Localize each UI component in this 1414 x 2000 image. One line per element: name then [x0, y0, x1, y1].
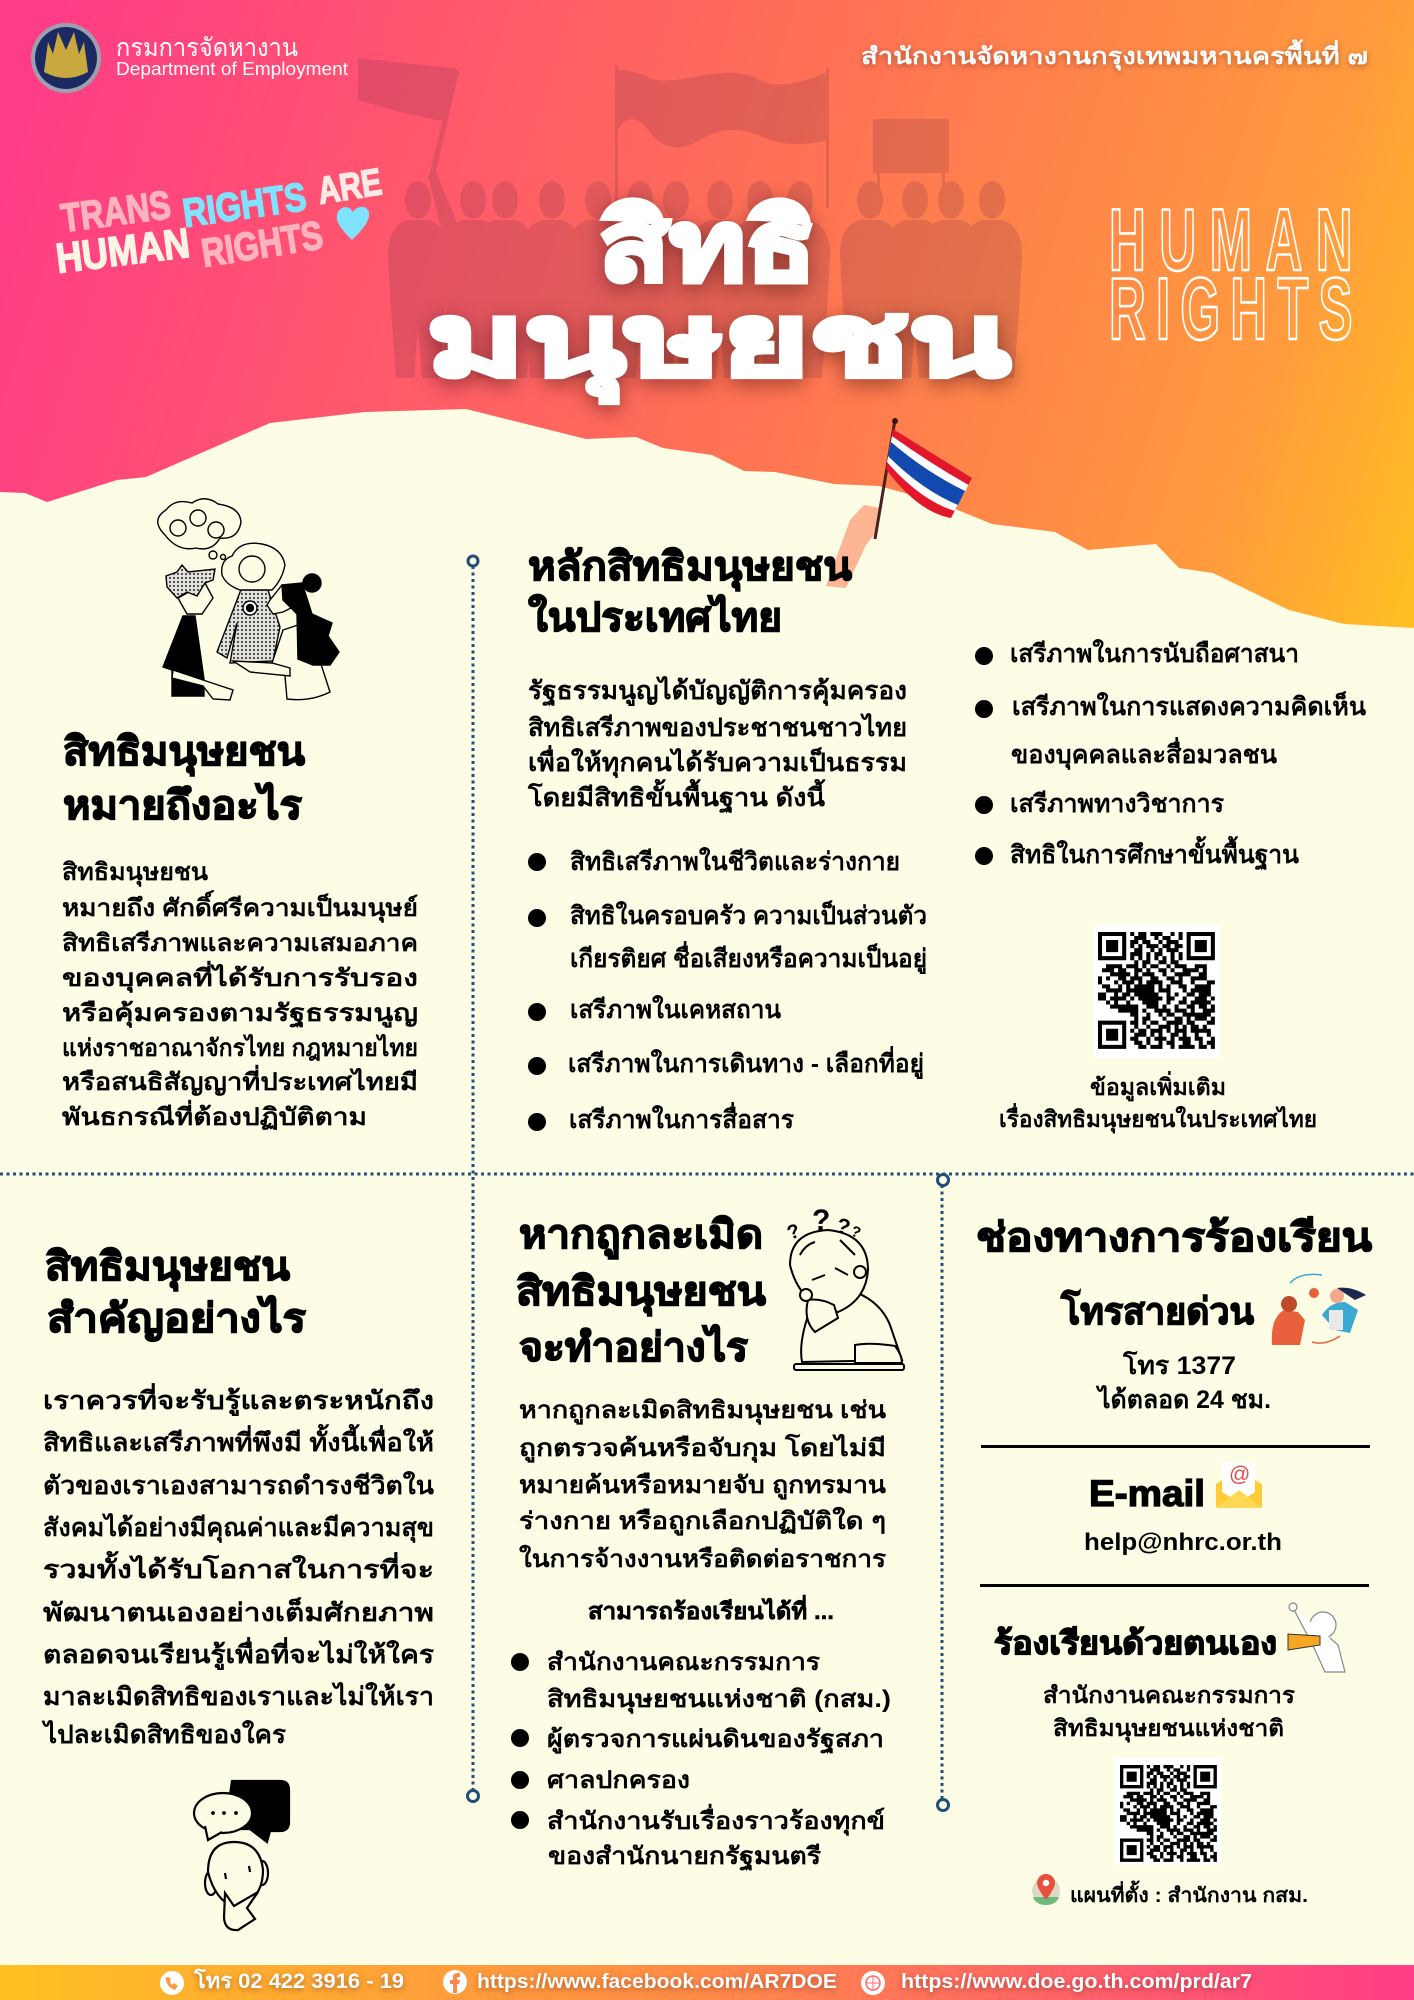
heading: [45, 1245, 307, 1342]
QR caption: เรื่องสิทธิมนุษยชนในประเทศไทย: [999, 1102, 1317, 1134]
hand waving Thai flag: [826, 418, 972, 588]
icon: facebook: [443, 1970, 467, 1994]
sticker: trans rights are human rights: RIGHTS: [199, 213, 326, 276]
heading: สิทธิมนุษยชน: [45, 1245, 290, 1292]
intro paragraph: รัฐธรรมนูญได้บัญญัติการคุ้มครอง: [528, 675, 907, 707]
hotline: [1060, 1289, 1271, 1414]
sticker: trans rights are human rights: ARE: [315, 161, 385, 213]
sticker: trans rights are human rights: HUMAN: [53, 219, 192, 282]
bullet list of agencies: สิทธิมนุษยชนแห่งชาติ (กสม.): [547, 1686, 891, 1715]
subheading: where to complain: สามารถร้องเรียนได้ที่ ...: [588, 1594, 834, 1624]
walk-in complaint: สำนักงานคณะกรรมการ: [1043, 1682, 1296, 1708]
bullet list of agencies: สำนักงานคณะกรรมการ: [547, 1649, 820, 1676]
protest crowd silhouette: [358, 58, 1022, 378]
bullet list right column: [975, 638, 1366, 871]
heading: หมายถึงอะไร: [63, 782, 303, 828]
header gradient banner: [0, 0, 1414, 640]
department name: กรมการจัดหางาน: [116, 34, 298, 62]
separator line: [981, 1445, 1370, 1448]
facebook url: https://www.facebook.com/AR7DOE: [477, 1971, 837, 1993]
hand lettered: human rights: RIGHTS: [1109, 261, 1353, 359]
heading: จะทำอย่างไร: [519, 1324, 749, 1370]
main title: [427, 191, 1010, 403]
illustration: confused person: ?: [834, 1213, 853, 1240]
panel: complaint channels: [976, 1216, 1372, 1907]
icon: email envelope: @: [1229, 1463, 1250, 1486]
sticker: trans rights are human rights: [53, 161, 385, 282]
intro paragraph: โดยมีสิทธิขั้นพื้นฐาน ดังนี้: [527, 778, 826, 814]
bullet list of agencies: [511, 1649, 891, 1872]
logo: Department of Employment: [31, 23, 348, 93]
icon: email envelope: [1216, 1462, 1262, 1508]
body text: หมายค้นหรือหมายจับ ถูกทรมาน: [519, 1472, 887, 1500]
bullet list right column: เสรีภาพทางวิชาการ: [1010, 790, 1225, 818]
bullet list right column: เสรีภาพในการแสดงความคิดเห็น: [1012, 691, 1366, 721]
footer bar: [0, 1965, 1414, 2000]
email: help@nhrc.or.th: [1084, 1529, 1282, 1556]
walk-in complaint: สิทธิมนุษยชนแห่งชาติ: [1053, 1715, 1284, 1743]
heading: [63, 730, 305, 828]
bullet list of agencies: ศาลปกครอง: [547, 1767, 690, 1794]
body text: หมายถึง ศักดิ์ศรีความเป็นมนุษย์: [62, 890, 418, 924]
body text: สังคมได้อย่างมีคุณค่าและมีความสุข: [43, 1512, 434, 1544]
body text: [62, 859, 418, 1131]
hand lettered: human rights: [1109, 192, 1353, 359]
icon: phone: [160, 1971, 184, 1995]
bullet list right column: เสรีภาพในการนับถือศาสนา: [1010, 638, 1299, 668]
email: E-mail: [1089, 1473, 1205, 1514]
sticker: trans rights are human rights: RIGHTS: [180, 175, 309, 236]
body text: พันธกรณีที่ต้องปฏิบัติตาม: [62, 1099, 367, 1131]
heading: สำคัญอย่างไร: [47, 1295, 307, 1342]
body text: ในการจ้างงานหรือติดต่อราชการ: [519, 1544, 886, 1573]
illustration: three people talking: [158, 499, 339, 700]
body text: ของบุคคลที่ได้รับการรับรอง: [62, 960, 418, 994]
QR code: map: [1114, 1758, 1222, 1865]
body text: สิทธิเสรีภาพและความเสมอภาค: [62, 930, 418, 957]
intro paragraph: สิทธิเสรีภาพของประชาชนชาวไทย: [528, 712, 907, 742]
body text: แห่งราชอาณาจักรไทย กฎหมายไทย: [62, 1033, 418, 1062]
panel: what human rights means: [62, 499, 418, 1131]
bullet list left column: เสรีภาพในการสื่อสาร: [569, 1102, 795, 1134]
illustration: confused person: ?: [849, 1223, 863, 1242]
illustration: confused person: [784, 1204, 904, 1370]
hand lettered: human rights: HUMAN: [1109, 192, 1353, 290]
heading: ในประเทศไทย: [528, 594, 782, 640]
panel: human rights principles in Thailand: [527, 545, 1366, 1134]
phone number: โทร 02 422 3916 - 19: [193, 1968, 404, 1993]
heading: หลักสิทธิมนุษยชน: [528, 545, 852, 592]
hotline: โทรสายด่วน: [1060, 1289, 1254, 1332]
body text: ไปละเมิดสิทธิของใคร: [41, 1719, 287, 1749]
main title: สิทธิ: [599, 191, 816, 301]
body text: สิทธิมนุษยชน: [62, 859, 209, 888]
paper mountain edge: [0, 409, 1414, 700]
hotline: ได้ตลอด 24 ชม.: [1095, 1384, 1271, 1414]
dotted dividers: [0, 556, 1414, 1810]
body text: สิทธิและเสรีภาพที่พึงมี ทั้งนี้เพื่อให้: [43, 1423, 434, 1457]
bullet list left column: เกียรติยศ ชื่อเสียงหรือความเป็นอยู่: [570, 941, 927, 975]
body text: ถูกตรวจค้นหรือจับกุม โดยไม่มี: [519, 1433, 886, 1464]
QR code: more information: [1093, 925, 1220, 1058]
map location: แผนที่ตั้ง : สำนักงาน กสม.: [1070, 1880, 1308, 1907]
panel: why human rights matter: [41, 1245, 435, 1930]
office name: สำนักงานจัดหางานกรุงเทพมหานครพื้นที่ ๗: [861, 39, 1368, 71]
body text: [41, 1383, 435, 1749]
bullet list of agencies: ผู้ตรวจการแผ่นดินของรัฐสภา: [547, 1726, 884, 1755]
QR caption: [999, 1070, 1317, 1134]
bullet list right column: ของบุคคลและสื่อมวลชน: [1011, 737, 1277, 771]
email: [1084, 1473, 1282, 1556]
body text: [519, 1397, 887, 1573]
body text: เราควรที่จะรับรู้และตระหนักถึง: [43, 1383, 434, 1417]
intro paragraph: [527, 675, 907, 814]
body text: ตัวของเราเองสามารถดำรงชีวิตใน: [43, 1470, 434, 1500]
main title: มนุษยชน: [427, 285, 1010, 403]
bullet list left column: สิทธิเสรีภาพในชีวิตและร่างกาย: [570, 846, 900, 876]
body text: หรือสนธิสัญญาที่ประเทศไทยมี: [62, 1064, 418, 1096]
bullet list of agencies: ของสำนักนายกรัฐมนตรี: [548, 1843, 821, 1872]
separator line: [980, 1584, 1369, 1587]
body text: ร่างกาย หรือถูกเลือกปฏิบัติใด ๆ: [519, 1506, 886, 1536]
body text: ตลอดจนเรียนรู้เพื่อที่จะไม่ให้ใคร: [43, 1637, 435, 1671]
website url: https://www.doe.go.th.com/prd/ar7: [901, 1971, 1252, 1993]
body text: รวมทั้งได้รับโอกาสในการที่จะ: [43, 1550, 434, 1584]
hotline: โทร 1377: [1122, 1350, 1236, 1380]
map location: [1032, 1874, 1308, 1907]
department name: [116, 34, 348, 79]
heading: สิทธิมนุษยชน: [516, 1270, 766, 1317]
panel: if your rights are violated: [511, 1204, 904, 1872]
body text: หรือคุ้มครองตามรัฐธรรมนูญ: [62, 1000, 418, 1029]
bullet list left column: สิทธิในครอบครัว ความเป็นส่วนตัว: [570, 900, 927, 930]
illustration: confused person: ?: [812, 1204, 830, 1237]
intro paragraph: เพื่อให้ทุกคนได้รับความเป็นธรรม: [528, 745, 907, 779]
icon: person with megaphone: [1288, 1603, 1345, 1672]
body text: พัฒนาตนเองอย่างเต็มศักยภาพ: [43, 1597, 434, 1627]
walk-in complaint: [994, 1625, 1296, 1743]
bullet list right column: สิทธิในการศึกษาขั้นพื้นฐาน: [1010, 835, 1299, 871]
sticker: trans rights are human rights: TRANS: [58, 183, 173, 241]
bullet list left column: เสรีภาพในเคหสถาน: [570, 994, 781, 1024]
icon: thinking head with speech bubbles: [194, 1781, 289, 1930]
walk-in complaint: ร้องเรียนด้วยตนเอง: [994, 1625, 1277, 1661]
bullet list of agencies: สำนักงานรับเรื่องราวร้องทุกข์: [547, 1803, 885, 1837]
department name: Department of Employment: [116, 59, 348, 79]
icon: two people with idea: [1272, 1274, 1366, 1345]
QR caption: ข้อมูลเพิ่มเติม: [1090, 1070, 1226, 1102]
heading: ช่องทางการร้องเรียน: [976, 1216, 1372, 1260]
icon: globe: [861, 1971, 885, 1995]
bullet list left column: [528, 846, 927, 1134]
body text: หากถูกละเมิดสิทธิมนุษยชน เช่น: [519, 1397, 887, 1426]
illustration: confused person: ?: [784, 1220, 803, 1245]
heading: หากถูกละเมิด: [519, 1213, 763, 1259]
heading: [516, 1213, 766, 1370]
heading: สิทธิมนุษยชน: [63, 730, 305, 777]
heading: [528, 545, 852, 640]
bullet list left column: เสรีภาพในการเดินทาง - เลือกที่อยู่: [568, 1046, 924, 1080]
body text: มาละเมิดสิทธิของเราและไม่ให้เรา: [43, 1681, 434, 1711]
